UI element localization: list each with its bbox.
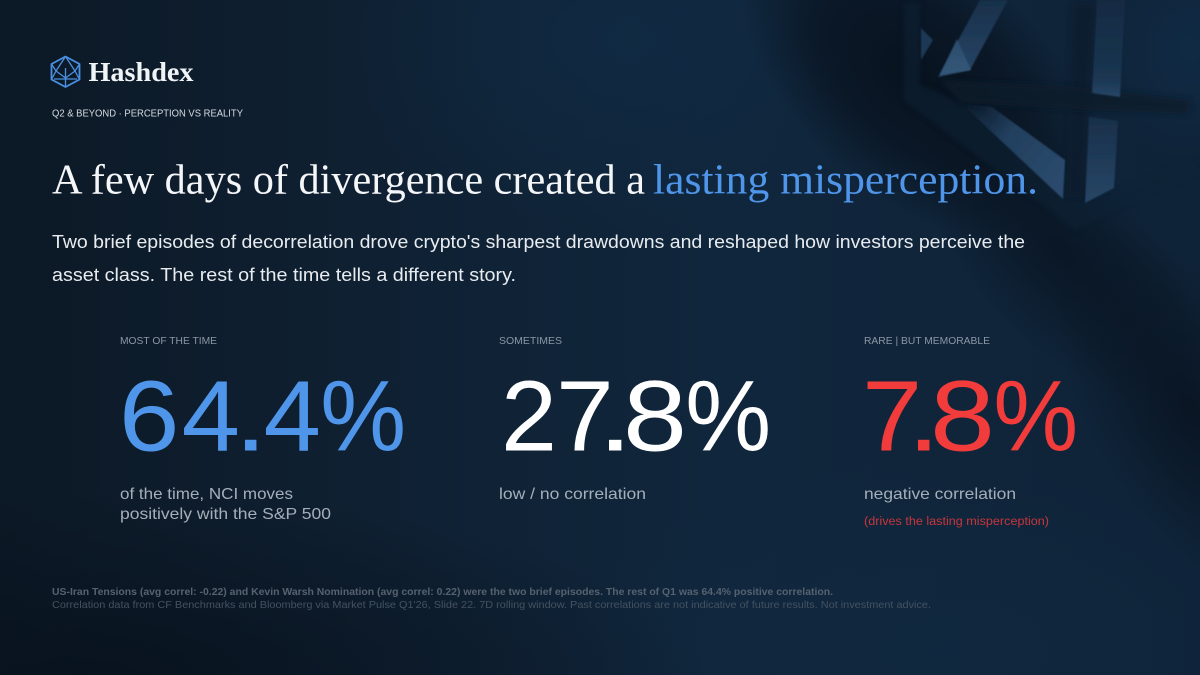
stat value: 8 (930, 360, 995, 472)
stat value: 7 (556, 360, 614, 472)
stat: most of the time (119, 335, 406, 523)
icon: Hashdex polyhedron (52, 56, 80, 87)
stat label: MOST OF THE TIME (120, 335, 217, 347)
eyebrow: Q2 & BEYOND · PERCEPTION VS REALITY (52, 108, 243, 120)
cube crossbars (1066, 3, 1096, 197)
stat description: negative correlation (864, 486, 1016, 503)
stat description: of the time, NCI moves (120, 486, 293, 503)
stat value: % (320, 360, 406, 472)
stat value: . (907, 360, 940, 472)
stat value: 2 (501, 360, 557, 472)
intro text: Two brief episodes of decorrelation drove crypto's sharpest drawdowns and reshaped how investors perceive the (52, 232, 1025, 252)
stat value: % (685, 360, 771, 472)
title (52, 156, 1038, 204)
stat: rare but memorable (862, 335, 1078, 528)
stat: sometimes (499, 335, 771, 503)
title: A few days of divergence created a (52, 156, 645, 204)
footnote: Correlation data from CF Benchmarks and Bloomberg via Market Pulse Q1'26, Slide 22. 7D rolling window. Past correlations are not indicative of future results. Not investment advice. (52, 599, 931, 611)
intro text (52, 232, 1025, 285)
stat value: . (234, 360, 267, 472)
stat value: 4 (182, 360, 240, 472)
cube frame (904, 3, 1195, 230)
stat label: RARE | BUT MEMORABLE (864, 335, 990, 347)
intro text: asset class. The rest of the time tells a different story. (52, 265, 516, 285)
stat description: low / no correlation (499, 486, 646, 503)
stat value: 7 (862, 360, 922, 472)
title: lasting misperception. (653, 156, 1038, 204)
wordmark: Hashdex (88, 57, 194, 87)
logo (52, 56, 194, 87)
stat value: 6 (119, 360, 180, 472)
stat value: 4 (264, 360, 321, 472)
stat description: positively with the S&P 500 (120, 506, 331, 523)
lit beams (938, 0, 1008, 77)
stat value: % (993, 360, 1078, 472)
decorative cube wireframe (904, 0, 1195, 230)
footnote (52, 586, 931, 611)
stat note: (drives the lasting misperception) (864, 516, 1049, 528)
stat label: SOMETIMES (499, 335, 562, 347)
stat value: . (597, 360, 633, 472)
footnote: US-Iran Tensions (avg correl: -0.22) and Kevin Warsh Nomination (avg correl: 0.22) were the two brief episodes. The rest of Q1 was 64.4% positive correlation. (52, 586, 833, 598)
stat value: 8 (623, 360, 687, 472)
